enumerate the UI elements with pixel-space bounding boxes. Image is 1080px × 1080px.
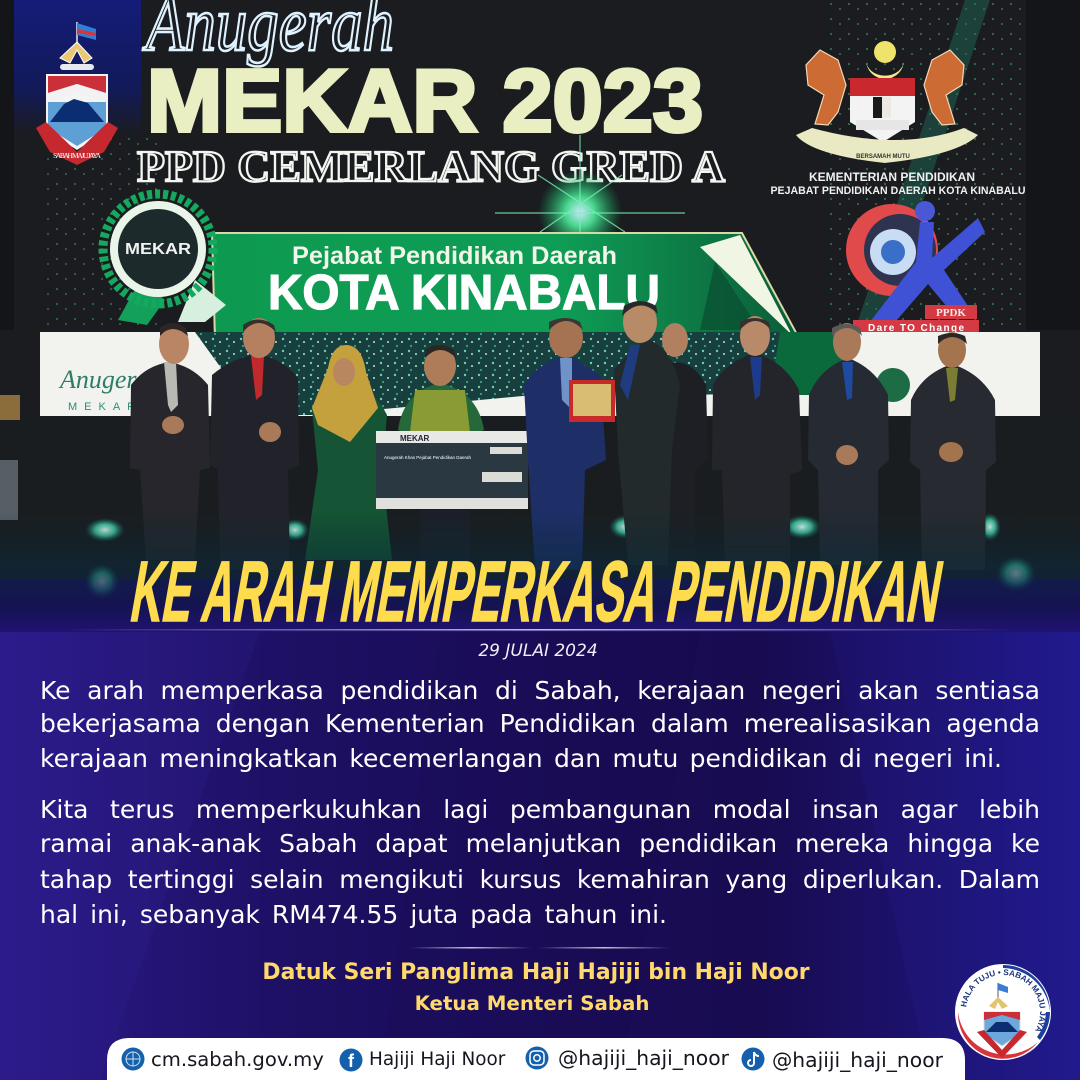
dark gradient over photo bottom: [0, 510, 1080, 635]
green award banner: [212, 233, 800, 340]
stage props at left: [0, 395, 20, 520]
divider under title: [62, 629, 1017, 630]
logo: Sabah coat of arms: [36, 22, 118, 165]
paragraph one: bekerjasama dengan Kementerian Pendidikan dalam merealisasikan agenda: [40, 709, 1040, 738]
presentation cheque: [376, 431, 528, 509]
text: Kementerian Pendidikan: KEMENTERIAN PENDIDIKAN: [809, 172, 975, 184]
footer logo: Hala Tuju Sabah Maju Jaya: [955, 964, 1051, 1060]
screen subtitle: PPD Cemerlang Gred A: PPD CEMERLANG GRED A: [137, 142, 725, 191]
person 4: [398, 345, 484, 565]
person 7: [614, 301, 680, 565]
footer: website: cm.sabah.gov.my: [151, 1048, 324, 1071]
paragraph two: ramai anak-anak Sabah dapat melanjutkan pendidikan mereka hingga ke: [40, 829, 1040, 858]
presentation cheque: Anugerah Khas Pejabat Pendidikan Daerah: [384, 455, 472, 460]
icon: instagram: [526, 1046, 548, 1070]
stage spot lights: [85, 513, 1036, 600]
person 6 behind: [662, 323, 708, 560]
signature title: Ketua Menteri Sabah: [415, 992, 649, 1015]
white stage wall: Anugerah: [58, 365, 163, 394]
green star burst: [495, 135, 685, 254]
banner text: Kota Kinabalu: KOTA KINABALU: [268, 266, 660, 320]
footer: facebook name: Hajiji Haji Noor: [369, 1049, 505, 1070]
icon: Mekar rosette: [103, 194, 226, 325]
text: Pejabat Pendidikan Daerah Kota Kinabalu: PEJABAT PENDIDIKAN DAERAH KOTA KINABALU: [770, 185, 1026, 197]
person 2: [210, 318, 299, 570]
screen title: MEKAR 2023: MEKAR 2023: [147, 51, 703, 150]
person 3: [305, 345, 392, 560]
white stage wall: [40, 332, 1040, 416]
footer: instagram handle: @hajiji_haji_noor: [558, 1046, 729, 1070]
icon: facebook: f: [348, 1051, 355, 1071]
logo: Sabah coat of arms: SABAH MAJU JAYA: [53, 151, 102, 160]
paragraph one: kerajaan meningkatkan kecemerlangan dan mutu pendidikan di negeri ini.: [40, 744, 1002, 773]
person 10: [910, 332, 996, 570]
paragraph one: Ke arah memperkasa pendidikan di Sabah, kerajaan negeri akan sentiasa: [40, 676, 1040, 705]
person 9: [808, 323, 889, 565]
paragraph one: [40, 676, 1040, 773]
paragraph two: tahap tertinggi selain mengikuti kursus kemahiran yang diperlukan. Dalam: [40, 865, 1040, 894]
paragraph two: Kita terus memperkukuhkan lagi pembangunan modal insan agar lebih: [40, 795, 1040, 824]
person 1: [130, 323, 210, 560]
plaque: [569, 380, 615, 422]
signature name: Datuk Seri Panglima Haji Hajiji bin Haji Noor: [262, 960, 810, 985]
stage backdrop screen: [0, 0, 1080, 480]
dark stage floor: [0, 416, 1080, 580]
paragraph two: [40, 795, 1040, 929]
logo: PPDKK: Dare TO Change: [868, 323, 964, 334]
logo: PPDKK: PPDK: [936, 307, 966, 319]
footer white pill: [107, 1038, 965, 1080]
panel facet shading: [0, 632, 1080, 1080]
banner text: Pejabat Pendidikan Daerah: Pejabat Pendidikan Daerah: [292, 242, 617, 270]
date: 29 JULAI 2024: [478, 641, 598, 661]
presentation cheque: MEKAR: [400, 434, 430, 443]
logo: PPDKK: [846, 201, 985, 334]
footer logo: Hala Tuju Sabah Maju Jaya: HALA TUJU • SABAH MAJU JAYA: [960, 969, 1046, 1032]
icon: Mekar rosette: MEKAR: [125, 241, 191, 258]
icon: facebook: [340, 1048, 362, 1072]
person 5: [524, 318, 606, 570]
white stage wall: MEKAR: [68, 401, 142, 413]
people standing on stage: [130, 301, 996, 570]
icon: tiktok: [742, 1048, 764, 1070]
person 8: [712, 316, 802, 565]
paragraph two: hal ini, sebanyak RM474.55 juta pada tahun ini.: [40, 900, 667, 929]
logo: Malaysia coat of arms: [796, 41, 978, 163]
purple text panel: [0, 632, 1080, 1080]
icon: globe: [122, 1048, 144, 1070]
logo: Malaysia coat of arms: BERSAMAH MUTU: [856, 154, 910, 160]
footer: tiktok handle: @hajiji_haji_noor: [772, 1048, 943, 1072]
divider above signature: [410, 947, 670, 948]
